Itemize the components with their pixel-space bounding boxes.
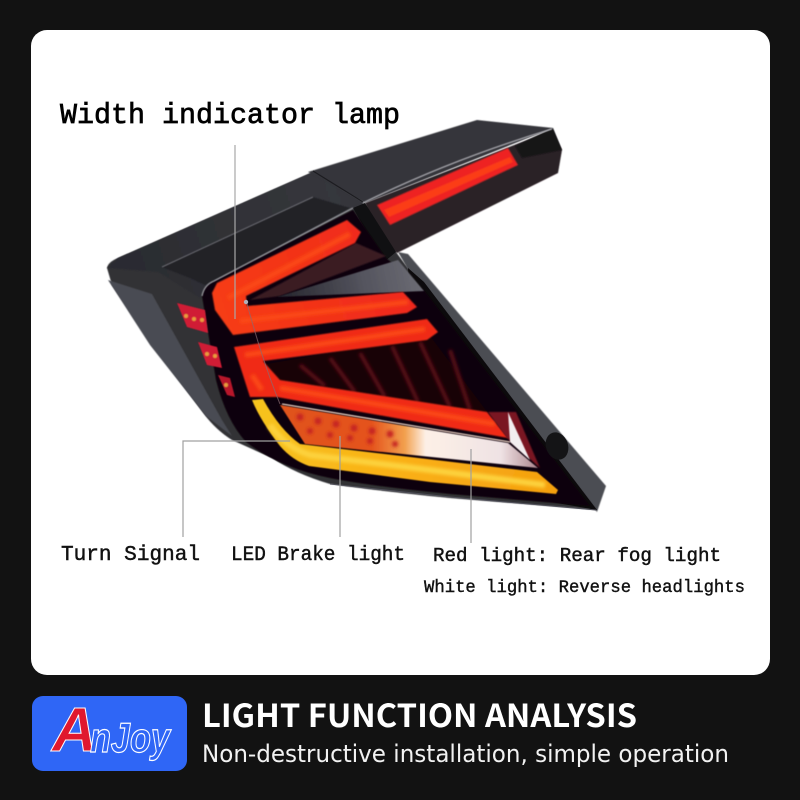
upper glossy fold [162, 197, 350, 285]
ribbed dark reflector [267, 336, 488, 413]
maroon upper lens zone [250, 243, 386, 300]
panel seam [313, 171, 363, 202]
amber strip glow [270, 425, 545, 485]
label: turn signal: Turn Signal [61, 544, 200, 567]
panel: white product card [31, 30, 770, 675]
leader line: fog and reverse [470, 449, 472, 543]
outer gray housing band on right [398, 252, 606, 512]
clear lens fold line [246, 300, 280, 404]
clear lens corner [488, 412, 540, 468]
lower bar inner glow [245, 329, 495, 424]
black cap at right tip [515, 128, 562, 158]
label: red light rear fog: Red light: Rear fog light [433, 545, 721, 567]
gray triangle reflection [277, 260, 424, 297]
footer heading: LIGHT FUNCTION ANALYSIS [202, 691, 637, 737]
right red light bar [377, 148, 518, 225]
right lens block [365, 130, 562, 253]
top left cover panel [107, 172, 365, 298]
logo badge [32, 696, 187, 771]
upper L red light bar [212, 220, 417, 335]
logo letters nJoy: nJoy [90, 714, 172, 761]
label: LED brake light: LED Brake light [231, 544, 405, 567]
lens stud [244, 300, 248, 304]
highlight left arc [202, 208, 353, 296]
top right cover panel [308, 120, 553, 203]
highlight line upper [363, 129, 552, 203]
footer subheading: Non-destructive installation, simple operation [202, 740, 729, 768]
highlight line left fold [162, 197, 313, 267]
label: white light reverse: White light: Reverse headlights [424, 578, 745, 598]
leader line: turn signal [183, 441, 290, 537]
logo letter A: A [50, 696, 97, 765]
LED reflector with brake and reverse zones [280, 404, 538, 468]
bottom edge highlight [330, 484, 596, 510]
lower E red light bar [234, 319, 508, 438]
lamp body silhouette [107, 172, 597, 510]
leader line: width indicator [234, 145, 236, 319]
left gray side strip [108, 280, 232, 436]
label: width indicator lamp: Width indicator lamp [60, 99, 400, 132]
turn marker lights [177, 303, 235, 397]
lens separator [353, 203, 396, 262]
main lens interior [202, 210, 590, 506]
amber turn signal strip [252, 399, 558, 494]
black band along right [408, 268, 597, 510]
leader line: LED brake [339, 436, 341, 537]
tail lamp illustration [107, 120, 606, 512]
mount hole [542, 429, 572, 463]
